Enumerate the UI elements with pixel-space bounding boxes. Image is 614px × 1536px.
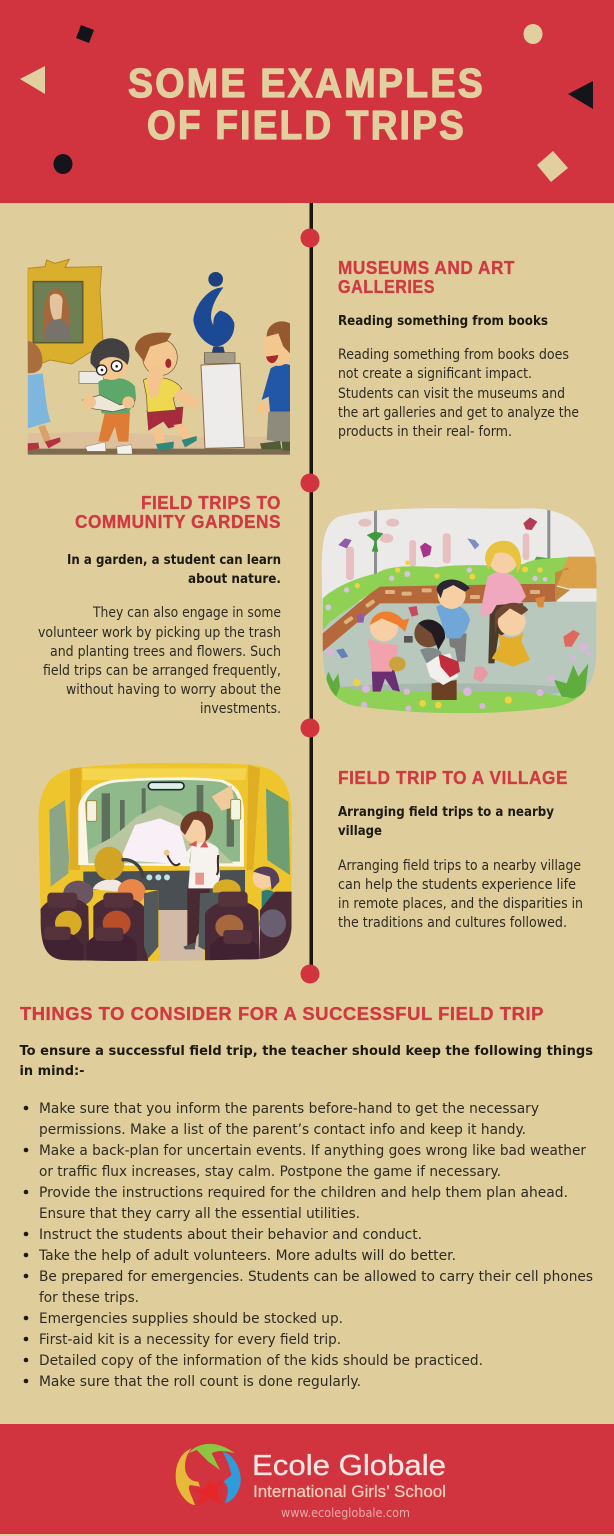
shape: black circle	[54, 154, 72, 174]
text: gardens: investments.	[200, 701, 281, 717]
title	[128, 60, 485, 148]
logo tagline: International Girls’ School	[253, 1483, 446, 1501]
bullet list: Provide the instructions required for the children and help them plan ahead.	[39, 1185, 568, 1201]
text: museums: Reading something from books does	[338, 347, 569, 363]
teacher	[480, 541, 526, 663]
bullet list: Take the help of adult volunteers. More adults will do better.	[38, 1248, 456, 1264]
boy in yellow shirt	[135, 332, 199, 451]
title: OF FIELD TRIPS	[147, 102, 466, 148]
bullet list	[24, 1101, 593, 1390]
website: www.ecoleglobale.com	[281, 1505, 410, 1520]
timeline dot 3	[300, 718, 320, 738]
bullet list: Instruct the students about their behavior and conduct.	[39, 1227, 422, 1243]
text: museums: the art galleries and get to analyze the	[338, 405, 579, 421]
boy with blue backpack	[436, 580, 470, 662]
seated children and seats	[40, 866, 292, 963]
subheading: village: Arranging field trips to a nearby	[338, 804, 554, 820]
bullet list: or traffic flux increases, stay calm. Postpone the game if necessary.	[39, 1164, 501, 1180]
sculpture on pedestal	[193, 272, 244, 448]
heading: gardens: FIELD TRIPS TO	[141, 492, 281, 513]
title: SOME EXAMPLES	[128, 60, 485, 106]
girl in blue dress	[28, 341, 61, 451]
subheading: museums: Reading something from books	[338, 313, 548, 329]
heading: village: FIELD TRIP TO A VILLAGE	[338, 767, 568, 788]
text: museums: not create a significant impact.	[338, 366, 532, 382]
text: village: Arranging field trips to a nearby village	[338, 858, 581, 874]
header banner	[0, 0, 614, 203]
text: village: the traditions and cultures followed.	[338, 915, 567, 931]
heading: museums	[338, 257, 515, 297]
text: village: in remote places, and the disparities in	[338, 896, 583, 912]
girl in yellow dress	[492, 603, 530, 667]
footer banner	[0, 1424, 614, 1534]
heading: things to consider: THINGS TO CONSIDER FOR A SUCCESSFUL FIELD TRIP	[20, 1003, 544, 1024]
illustration: children in a museum	[28, 259, 293, 455]
bullet list: for these trips.	[39, 1290, 139, 1306]
text: gardens: and planting trees and flowers. Such	[50, 644, 281, 660]
shape: black triangle	[568, 81, 593, 109]
timeline dot 4	[300, 964, 320, 984]
shape: black square	[76, 25, 94, 43]
bullet list: Be prepared for emergencies. Students can be allowed to carry their cell phones	[39, 1269, 593, 1285]
bullet list: Make sure that you inform the parents before-hand to get the necessary	[39, 1101, 539, 1117]
text: village: can help the students experience life	[338, 877, 576, 893]
subheading: gardens: In a garden, a student can learn	[67, 552, 281, 568]
heading: gardens	[75, 492, 281, 532]
intro text: in mind:-	[20, 1063, 84, 1079]
text: gardens: field trips can be arranged frequently,	[43, 663, 281, 679]
bullet list: First-aid kit is a necessity for every field trip.	[39, 1332, 341, 1348]
boy in blue sweater	[257, 321, 293, 451]
teacher	[164, 811, 220, 949]
subheading: village	[338, 804, 554, 839]
boy with camera and red backpack	[404, 619, 460, 700]
text: gardens: volunteer work by picking up the trash	[38, 625, 281, 641]
heading: museums: MUSEUMS AND ART	[338, 257, 515, 278]
logo icon	[176, 1444, 241, 1507]
subheading: village: village	[338, 823, 382, 839]
logo name: Ecole Globale	[252, 1450, 446, 1482]
timeline dot 2	[300, 474, 320, 492]
heading: museums: GALLERIES	[338, 276, 435, 297]
bullet list: Emergencies supplies should be stocked up.	[39, 1311, 343, 1327]
text: museums	[338, 347, 579, 440]
timeline dot 1	[300, 228, 320, 248]
text: gardens: They can also engage in some	[92, 605, 281, 621]
timeline line	[310, 203, 313, 975]
illustration: children in a garden	[320, 503, 600, 717]
butterflies	[336, 517, 580, 683]
girl with orange hair	[367, 611, 409, 692]
heading: gardens: COMMUNITY GARDENS	[75, 511, 281, 532]
boy reading with glasses	[83, 338, 136, 454]
driver	[93, 847, 143, 892]
intro text: To ensure a successful field trip, the teacher should keep the following things	[20, 1043, 593, 1059]
subheading: gardens	[67, 552, 281, 587]
bullet list: Ensure that they carry all the essential utilities.	[39, 1206, 360, 1222]
subheading: gardens: about nature.	[188, 571, 281, 587]
text: gardens	[38, 605, 281, 717]
bullet list: Make a back-plan for uncertain events. If anything goes wrong like bad weather	[39, 1143, 586, 1159]
text: village	[338, 858, 583, 931]
bullet list: Make sure that the roll count is done regularly.	[39, 1374, 361, 1390]
bullet list: permissions. Make a list of the parent’s contact info and keep it handy.	[39, 1122, 526, 1138]
text: museums: Students can visit the museums and	[338, 386, 565, 402]
shape: cream circle	[524, 24, 542, 44]
shape: cream triangle	[20, 66, 45, 94]
text: gardens: without having to worry about the	[66, 682, 281, 698]
bullet list: Detailed copy of the information of the kids should be practiced.	[39, 1353, 483, 1369]
text: museums: products in their real- form.	[338, 424, 512, 440]
illustration: teacher in a school bus	[37, 760, 293, 963]
shape: cream diamond	[537, 151, 568, 182]
intro text	[20, 1043, 593, 1079]
